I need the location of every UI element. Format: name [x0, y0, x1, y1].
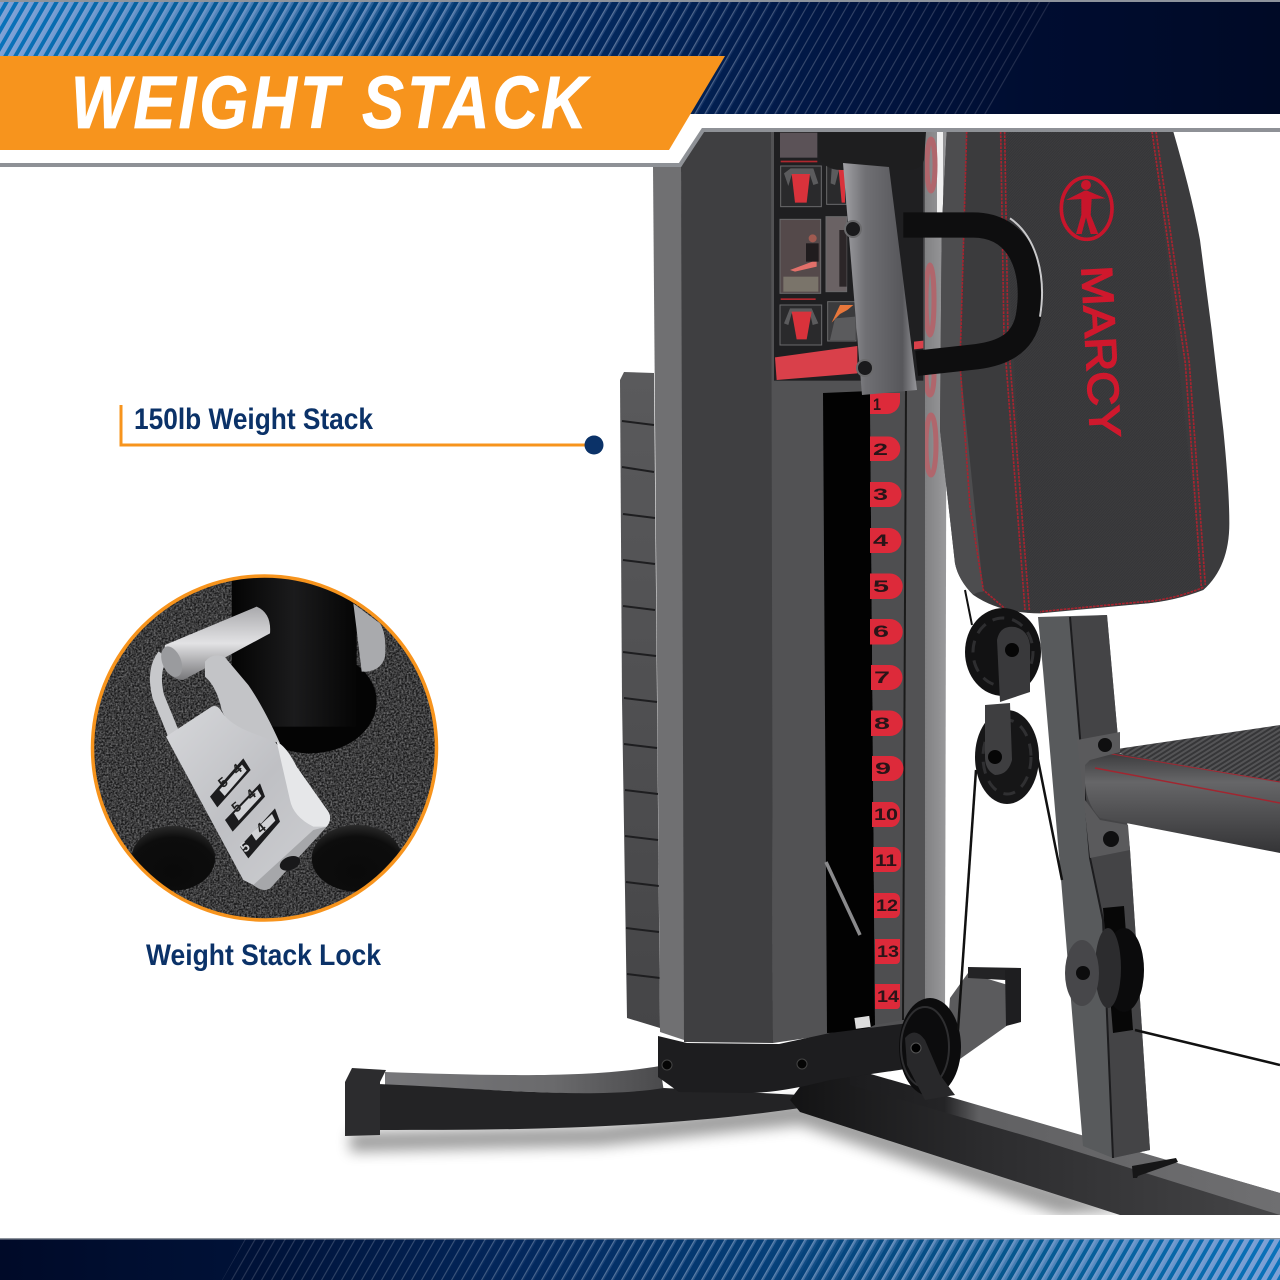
numbered weight tabs: 2: [873, 440, 888, 459]
header band: [0, 0, 1280, 114]
silver rear strip: [925, 132, 946, 1004]
shackle: [156, 655, 173, 733]
numbered weight tabs: 11: [875, 851, 897, 870]
title banner: [0, 56, 725, 150]
selector strip: [870, 414, 875, 1016]
padlock body: [166, 706, 330, 890]
handle highlight: [1010, 218, 1042, 317]
cables: [958, 590, 1280, 1065]
combination dials: 4: [253, 819, 269, 836]
callout label: 150lb Weight Stack: [134, 403, 373, 436]
numbered weight tabs: 6: [873, 622, 889, 641]
weight plates: [620, 372, 660, 1028]
Marcy logo: [1061, 177, 1112, 239]
rear pulley: [1065, 906, 1144, 1033]
grey header rule: [0, 130, 1280, 165]
header white ribbon: [0, 114, 1280, 164]
lower pulley: [975, 703, 1039, 804]
numbered weight tabs: 4: [873, 531, 889, 550]
floor holes: [132, 826, 215, 891]
numbered weight tabs: 10: [874, 805, 898, 824]
combination dials: 5: [215, 773, 231, 791]
selector pin: [826, 862, 871, 1029]
tall steel column: [653, 132, 925, 1043]
numbered weight tabs: 3: [873, 485, 888, 504]
combination dials: [210, 758, 280, 858]
product photo: home gym: [345, 130, 1280, 1215]
numbered weight tabs: 5: [873, 577, 889, 596]
floor shadows: [350, 1100, 1130, 1215]
steel pin: [163, 607, 270, 680]
bracket bolts: [845, 221, 873, 376]
seat: [1085, 725, 1280, 853]
black top block: [818, 132, 926, 170]
inset photo: weight stack lock: [90, 570, 440, 924]
inset ring: [92, 576, 436, 920]
seat post: [1038, 615, 1150, 1158]
numbered weight tabs: 14: [877, 987, 900, 1006]
seat back cushion: [940, 132, 1229, 613]
numbered weight tabs: 1: [873, 395, 881, 414]
upper pulley: [965, 608, 1041, 702]
floor texture: [90, 574, 440, 924]
keyhole: [278, 853, 302, 874]
combination dials: 4: [243, 785, 259, 803]
right latch: [353, 603, 385, 672]
callout: 150lb weight stack: [121, 403, 604, 454]
instruction poster: [774, 130, 923, 381]
numbered weight tabs: [870, 393, 904, 1009]
combination dials: 4: [229, 760, 245, 777]
numbered weight tabs: 7: [874, 668, 890, 687]
main floor beam: [790, 1060, 1280, 1215]
padlock neck: [205, 655, 280, 743]
pillar and socket: [272, 664, 377, 754]
rear foot: [945, 967, 1021, 1060]
left arm of base: [345, 1066, 800, 1136]
bracket bolts: [662, 1059, 807, 1070]
silver bracket tube: [843, 163, 917, 395]
numbered weight tabs: 8: [874, 714, 890, 733]
inset caption: Weight Stack Lock: [146, 939, 381, 972]
U handle: [903, 225, 1030, 363]
title: WEIGHT STACK: [71, 61, 591, 144]
footer band: [0, 1238, 1280, 1280]
combination dials: 5: [237, 838, 253, 855]
seat bracket: [1077, 732, 1130, 858]
base pulley: [899, 998, 961, 1100]
black base bracket: [658, 1024, 903, 1093]
numbered weight tabs: 13: [877, 942, 899, 961]
combination dials: 5: [228, 798, 244, 815]
numbered weight tabs: 9: [875, 759, 891, 778]
numbered weight tabs: 12: [876, 896, 898, 915]
black weight slot: [823, 391, 875, 1033]
Marcy wordmark: MARCY: [1072, 265, 1129, 439]
